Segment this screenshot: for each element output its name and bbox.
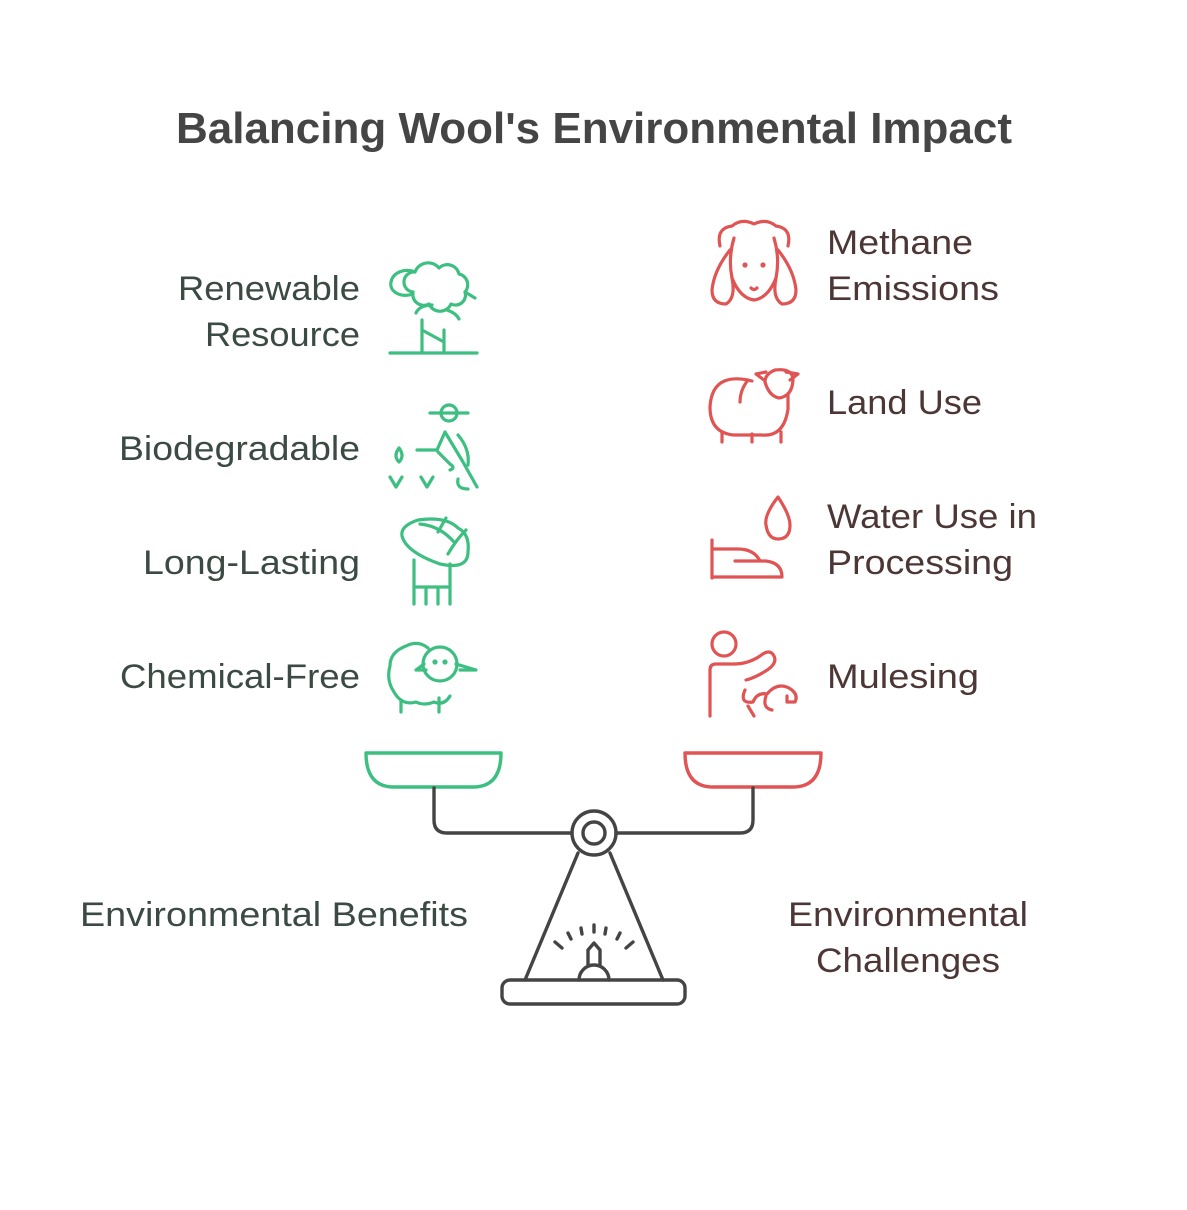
label: mulesing: Mulesing xyxy=(827,658,979,696)
chart: balance scale xyxy=(366,753,821,1004)
icon: person with sheep xyxy=(710,632,796,716)
benefits pan xyxy=(366,753,501,787)
beam xyxy=(434,788,753,833)
icon: sheep by tree xyxy=(390,263,477,353)
label: water use xyxy=(827,498,1037,582)
title: Balancing Wool's Environmental Impact xyxy=(176,104,1012,153)
label: renewable resource: Resource xyxy=(205,316,360,354)
label: environmental challenges: Environmental xyxy=(788,896,1028,934)
label: renewable resource xyxy=(178,270,360,354)
label: environmental challenges xyxy=(788,896,1028,980)
label: renewable resource: Renewable xyxy=(178,270,360,308)
icon: sheep xyxy=(710,370,798,442)
label: long-lasting: Long-Lasting xyxy=(143,544,360,582)
label: water use: Processing xyxy=(827,544,1013,582)
label: land use: Land Use xyxy=(827,384,982,422)
icon: farmer planting xyxy=(390,405,477,489)
label: water use: Water Use in xyxy=(827,498,1037,536)
stand xyxy=(525,853,663,980)
pivot xyxy=(572,811,616,855)
label: environmental challenges: Challenges xyxy=(816,942,1000,980)
bulb xyxy=(579,943,609,980)
icon: sheep head xyxy=(712,221,796,304)
label: chemical-free: Chemical-Free xyxy=(120,658,360,696)
icon: scarf xyxy=(402,518,468,604)
panel: benefits labels xyxy=(119,270,360,696)
label: methane emissions: Emissions xyxy=(827,270,999,308)
icons: benefits (green) xyxy=(389,263,477,712)
label: environmental benefits: Environmental Benefits xyxy=(80,896,468,934)
label: biodegradable: Biodegradable xyxy=(119,430,360,468)
label: methane emissions: Methane xyxy=(827,224,973,262)
icon: water drop and hand xyxy=(712,497,790,578)
panel: challenges labels xyxy=(827,224,1037,696)
icons: challenges (red) xyxy=(710,221,798,716)
label: methane emissions xyxy=(827,224,999,308)
icon: sheep face xyxy=(389,643,476,712)
challenges pan xyxy=(685,753,821,787)
